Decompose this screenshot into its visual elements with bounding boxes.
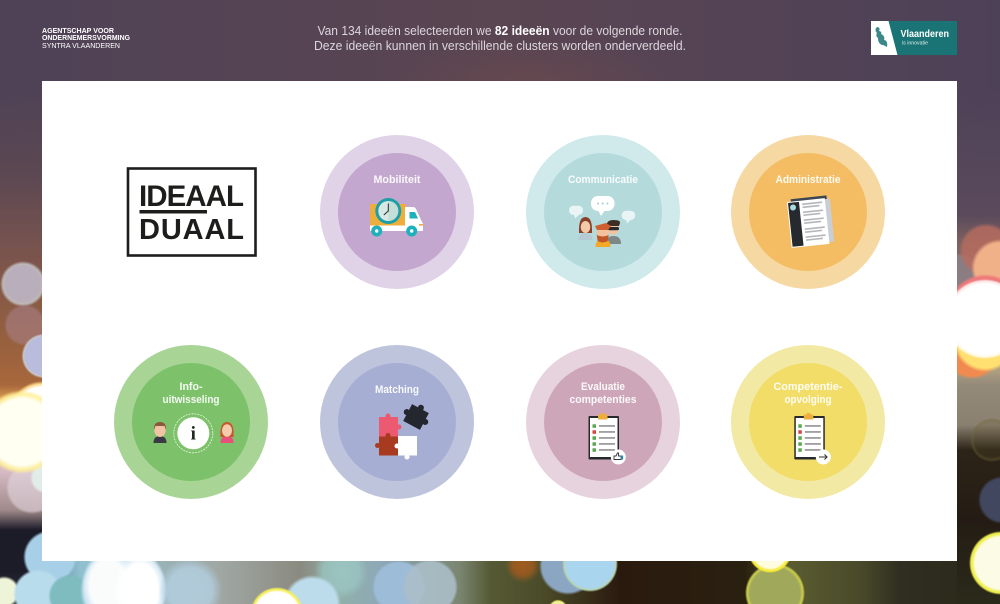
agency name: ONDERNEMERSVORMING bbox=[42, 35, 131, 42]
header text: Deze ideeën kunnen in verschillende clusters worden onderverdeeld. bbox=[314, 39, 686, 53]
agency name: SYNTRA VLAANDEREN bbox=[42, 43, 120, 50]
agency name bbox=[42, 28, 131, 50]
cluster: Matching: Matching bbox=[375, 384, 419, 396]
icon: information exchange between two people bbox=[154, 414, 234, 453]
cluster: Info-uitwisseling: Info- bbox=[180, 381, 203, 393]
icon: delivery truck with clock bbox=[370, 198, 423, 236]
cluster: Competentie-opvolging: opvolging bbox=[784, 394, 832, 406]
cluster: Evaluatie competenties: competenties bbox=[570, 394, 636, 406]
cluster: Administratie bbox=[731, 135, 885, 289]
cluster: Competentie-opvolging bbox=[731, 345, 885, 499]
cluster: Communicatie: Communicatie bbox=[568, 174, 638, 186]
cluster: Matching bbox=[320, 345, 474, 499]
cluster: Competentie-opvolging: Competentie- bbox=[774, 381, 843, 393]
header text bbox=[314, 24, 686, 53]
cluster: Evaluatie competenties: Evaluatie bbox=[581, 381, 625, 393]
icon: stack of documents bbox=[787, 195, 834, 248]
logo: Vlaanderen bbox=[871, 21, 957, 55]
logo: Ideaal Duaal: IDEAAL bbox=[139, 180, 244, 213]
cluster: Info-uitwisseling bbox=[114, 345, 268, 499]
agency name: AGENTSCHAP VOOR bbox=[42, 28, 114, 35]
cluster: Mobiliteit bbox=[320, 135, 474, 289]
logo: Vlaanderen: Vlaanderen bbox=[900, 28, 949, 40]
icon: clipboard with arrow bbox=[794, 413, 831, 464]
icon: clipboard with thumbs up bbox=[588, 413, 626, 464]
cluster: Mobiliteit: Mobiliteit bbox=[374, 174, 421, 186]
cluster: Communicatie bbox=[526, 135, 680, 289]
white panel bbox=[42, 81, 957, 561]
icon: three people talking bbox=[569, 196, 635, 247]
logo: Vlaanderen: is innovatie bbox=[902, 40, 928, 46]
logo: Ideaal Duaal bbox=[128, 168, 256, 256]
cluster: Administratie: Administratie bbox=[776, 174, 840, 186]
cluster: Evaluatie competenties bbox=[526, 345, 680, 499]
icon: puzzle pieces bbox=[375, 399, 434, 460]
cluster: Info-uitwisseling: uitwisseling bbox=[162, 394, 220, 406]
icon: information exchange between two people: i bbox=[191, 424, 196, 444]
logo: Ideaal Duaal: DUAAL bbox=[139, 214, 244, 246]
header text: Van 134 ideeën selecteerden we 82 ideeën voor de volgende ronde. bbox=[318, 24, 682, 38]
